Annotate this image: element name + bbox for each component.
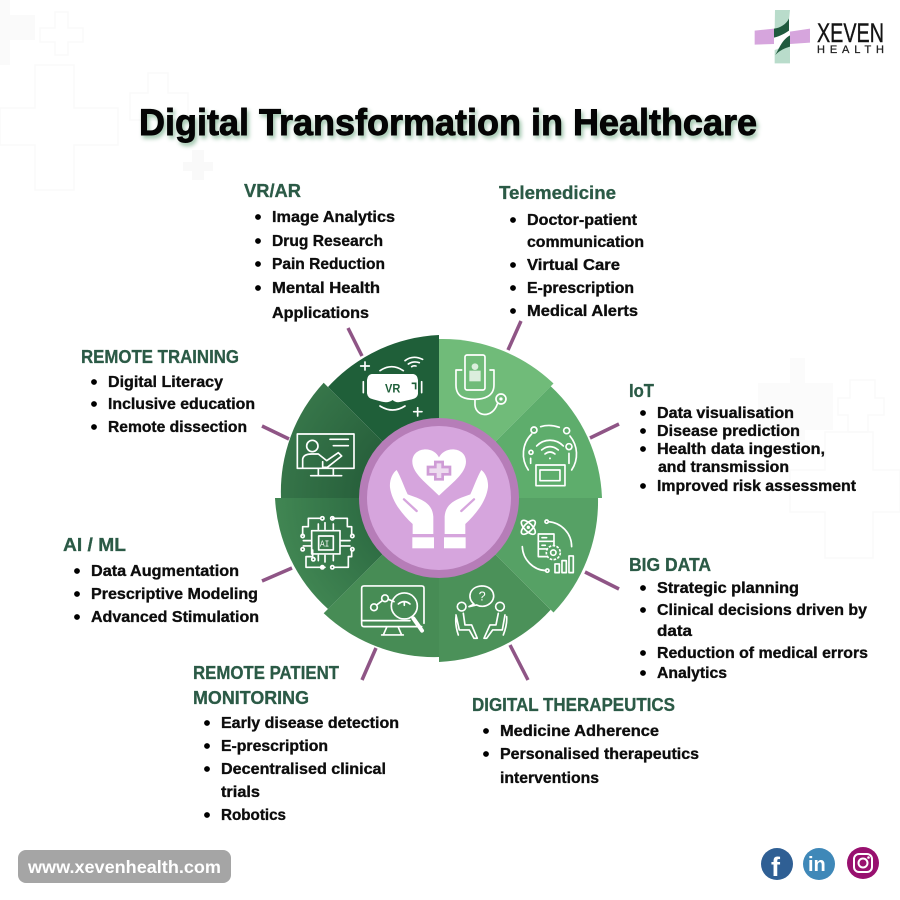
heading: Remote Patient Monitoring: REMOTE PATIENT bbox=[193, 662, 340, 683]
list: IoT items: Data visualisation bbox=[657, 405, 794, 422]
list: Remote Patient Monitoring items: Early disease detection bbox=[221, 715, 399, 732]
heading: Digital Therapeutics: DIGITAL THERAPEUTICS bbox=[472, 694, 675, 715]
list: IoT items: Improved risk assessment bbox=[657, 478, 857, 495]
segment: Remote Training bbox=[281, 383, 439, 498]
heading: AI / ML: AI / ML bbox=[63, 534, 126, 555]
list: IoT items bbox=[640, 405, 857, 495]
logo: Xeven Health bbox=[755, 10, 884, 63]
list: Remote Patient Monitoring items: Robotics bbox=[221, 807, 286, 824]
list: Digital Therapeutics items: interventions bbox=[500, 770, 599, 787]
segment: AI / ML bbox=[275, 498, 439, 609]
list: AI / ML items: Prescriptive Modeling bbox=[91, 586, 258, 603]
title: Digital Transformation in Healthcare bbox=[139, 102, 757, 143]
list: VR/AR items: Pain Reduction bbox=[272, 256, 385, 273]
icon: LinkedIn: in bbox=[808, 854, 826, 876]
heading: Remote Patient Monitoring: MONITORING bbox=[193, 687, 309, 708]
list: VR/AR items: Mental Health bbox=[272, 280, 380, 297]
panel: AI / ML bbox=[63, 534, 259, 626]
icon: IoT wifi device bbox=[523, 425, 577, 486]
logo mark bbox=[755, 10, 810, 63]
icon: big data analytics bbox=[519, 518, 573, 573]
list: Digital Therapeutics items: Medicine Adherence bbox=[500, 723, 659, 740]
panel: Digital Therapeutics bbox=[472, 694, 699, 787]
list: IoT items: Disease prediction bbox=[657, 423, 800, 440]
list: Remote Training items: Remote dissection bbox=[108, 419, 247, 436]
icon: heart with cross bbox=[412, 449, 466, 496]
list: Telemedicine items: Virtual Care bbox=[527, 257, 620, 274]
list: Big Data items: data bbox=[657, 623, 692, 640]
panel: Telemedicine bbox=[499, 182, 644, 320]
icon: remote training screen bbox=[297, 434, 354, 476]
icon: VR headset bbox=[361, 357, 423, 416]
list: Remote Training items: Inclusive education bbox=[108, 396, 255, 413]
icon: AI chip bbox=[301, 517, 354, 569]
list: IoT items: and transmission bbox=[658, 459, 789, 476]
icon: therapy conversation bbox=[456, 586, 507, 638]
icon: AI chip: AI bbox=[320, 540, 329, 550]
heading: Remote Patient Monitoring bbox=[193, 662, 340, 708]
heading: Telemedicine: Telemedicine bbox=[499, 182, 616, 203]
list: Telemedicine items: Doctor-patient bbox=[527, 212, 638, 229]
panel: VR/AR bbox=[244, 180, 395, 322]
icon: Instagram bbox=[847, 847, 879, 879]
list: VR/AR items bbox=[255, 209, 395, 322]
list: Big Data items: Clinical decisions driven by bbox=[657, 602, 867, 619]
list: VR/AR items: Applications bbox=[272, 305, 369, 322]
list: AI / ML items: Data Augmentation bbox=[91, 563, 239, 580]
panel: Remote Patient Monitoring bbox=[193, 662, 399, 824]
icon: left hand bbox=[390, 470, 434, 548]
segment: VR/AR bbox=[328, 335, 439, 498]
connector lines bbox=[262, 321, 619, 680]
icon: VR headset: VR bbox=[385, 382, 401, 396]
list: Telemedicine items: Medical Alerts bbox=[527, 303, 638, 320]
wheel diagram bbox=[275, 335, 602, 662]
segment: Telemedicine bbox=[439, 339, 554, 498]
list: Big Data items: Analytics bbox=[657, 665, 727, 682]
icon: phone with stethoscope bbox=[456, 355, 506, 414]
heading: VR/AR: VR/AR bbox=[244, 180, 301, 201]
list: Big Data items: Strategic planning bbox=[657, 580, 799, 597]
list: Digital Therapeutics items bbox=[483, 723, 699, 787]
list: Telemedicine items: communication bbox=[527, 234, 644, 251]
logo text HEALTH: HEALTH bbox=[817, 44, 884, 56]
segment: Big Data bbox=[439, 498, 598, 612]
segment: Remote Patient Monitoring bbox=[324, 498, 439, 657]
website pill bbox=[18, 850, 231, 883]
panel: Remote Training bbox=[81, 346, 255, 436]
icon: monitor with magnifier bbox=[362, 586, 424, 635]
icon: therapy conversation: ? bbox=[479, 590, 486, 604]
icon: Facebook: f bbox=[771, 852, 781, 882]
heading: Big Data: BIG DATA bbox=[629, 554, 711, 575]
list: Remote Patient Monitoring items: trials bbox=[221, 784, 260, 801]
list: Remote Patient Monitoring items: E-prescription bbox=[221, 738, 328, 755]
icon: right hand bbox=[444, 470, 488, 548]
list: Remote Patient Monitoring items: Decentralised clinical bbox=[221, 761, 386, 778]
website pill: www.xevenhealth.com bbox=[27, 857, 221, 877]
social icons bbox=[761, 847, 879, 882]
list: VR/AR items: Drug Research bbox=[272, 233, 383, 250]
list: Remote Patient Monitoring items bbox=[204, 715, 399, 824]
heading: IoT: IoT bbox=[629, 380, 655, 401]
list: AI / ML items bbox=[74, 563, 259, 626]
list: Telemedicine items: E-prescription bbox=[527, 280, 634, 297]
list: Big Data items: Reduction of medical errors bbox=[657, 645, 868, 662]
list: Remote Training items: Digital Literacy bbox=[108, 374, 223, 391]
center circle with caring hands bbox=[359, 418, 519, 578]
list: VR/AR items: Image Analytics bbox=[272, 209, 395, 226]
list: IoT items: Health data ingestion, bbox=[657, 441, 825, 458]
panel: IoT bbox=[629, 380, 857, 495]
list: Big Data items bbox=[640, 580, 868, 682]
segment: IoT bbox=[439, 386, 602, 498]
list: Digital Therapeutics items: Personalised therapeutics bbox=[500, 746, 699, 763]
heading: Remote Training: REMOTE TRAINING bbox=[81, 346, 239, 367]
list: Telemedicine items bbox=[510, 212, 644, 320]
panel: Big Data bbox=[629, 554, 868, 682]
list: AI / ML items: Advanced Stimulation bbox=[91, 609, 259, 626]
list: Remote Training items bbox=[91, 374, 255, 436]
segment: Digital Therapeutics bbox=[439, 498, 551, 662]
